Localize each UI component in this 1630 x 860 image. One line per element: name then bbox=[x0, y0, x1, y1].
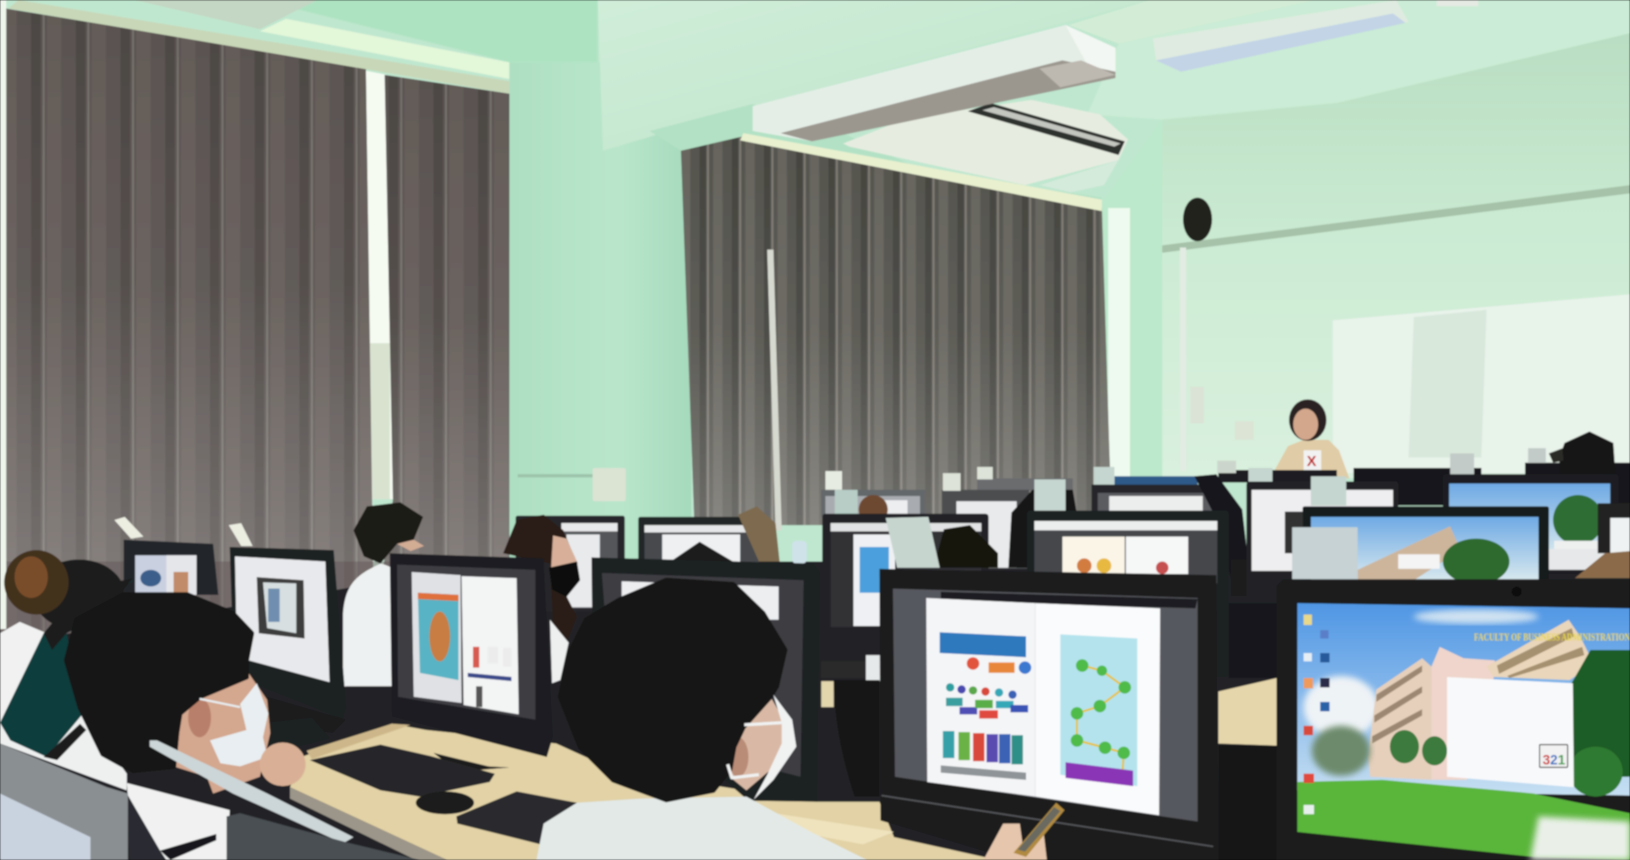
book toolbar bbox=[941, 592, 1198, 608]
right page infographic bbox=[1060, 634, 1137, 786]
paper tag bbox=[886, 517, 940, 568]
laptops front left bbox=[0, 744, 420, 860]
keyboards and mouse bbox=[310, 745, 577, 844]
wallpaper faded corner bbox=[1530, 816, 1630, 860]
ear bbox=[728, 737, 748, 777]
right page bbox=[1035, 603, 1160, 815]
monitor with digital book bbox=[879, 569, 1218, 860]
left curtains bbox=[0, 0, 509, 645]
media player icon: 321 bbox=[1543, 752, 1566, 767]
right edge monitor bbox=[1598, 503, 1630, 553]
teal hair bbox=[0, 580, 133, 757]
hand holding phone bbox=[983, 803, 1064, 860]
left page flow chart bbox=[946, 657, 1031, 719]
presenter: X bbox=[1307, 454, 1317, 470]
ceiling light fixtures bbox=[135, 0, 1478, 141]
person in dark cap back right bbox=[1549, 432, 1615, 474]
ear bbox=[188, 698, 211, 737]
dark haired student bbox=[1194, 474, 1251, 582]
mask flap bbox=[150, 740, 353, 843]
left page bottles bbox=[941, 731, 1026, 780]
monitor with campus desktop wallpaper bbox=[1277, 579, 1630, 860]
screen bbox=[893, 589, 1198, 822]
girl with black mask bbox=[503, 515, 580, 683]
student far left with bun bbox=[0, 550, 125, 728]
presenter bbox=[1272, 399, 1349, 478]
chair shadow bbox=[127, 793, 166, 860]
mask bbox=[728, 695, 796, 800]
desktop icons bbox=[1304, 615, 1330, 814]
monitor centre behind student bbox=[591, 557, 820, 802]
building bbox=[1368, 620, 1594, 780]
wall speaker bbox=[1183, 198, 1212, 241]
bag strap bbox=[44, 724, 86, 760]
face bbox=[174, 670, 270, 793]
desktop sky bbox=[1297, 603, 1630, 796]
installer dialog bbox=[1447, 677, 1574, 787]
student in white shirt middle row bbox=[343, 502, 424, 713]
monitor with wallpaper back right bbox=[1443, 474, 1619, 574]
desk surface bbox=[265, 718, 998, 860]
shirt bbox=[127, 783, 230, 860]
backpack strap bbox=[160, 834, 216, 860]
rear monitor cluster right bbox=[821, 474, 1630, 707]
monitor back left small bbox=[114, 517, 253, 595]
right desk and dark cabinet bbox=[1218, 678, 1277, 860]
left page banner bbox=[940, 632, 1026, 657]
left page bbox=[926, 598, 1035, 797]
dark room underlay below the monitors bbox=[0, 562, 1630, 860]
hair bbox=[560, 580, 785, 800]
hair bbox=[67, 595, 252, 771]
whiteboard and wall fittings bbox=[518, 247, 1630, 501]
trees bbox=[1312, 650, 1630, 797]
face bbox=[730, 697, 787, 790]
chin highlight bbox=[882, 796, 1213, 846]
webcam bbox=[1511, 587, 1522, 597]
dark hair top bbox=[44, 578, 133, 650]
center curtain bbox=[681, 133, 1110, 530]
front student left with teal hair behind bbox=[0, 578, 133, 790]
front student centre bbox=[536, 580, 867, 860]
white shirt behind bbox=[0, 713, 127, 790]
shirt bbox=[536, 797, 867, 860]
front student left bbox=[67, 595, 353, 860]
monitor with book spread bbox=[1027, 511, 1229, 677]
monitor left bbox=[230, 547, 346, 733]
media player icon bbox=[1540, 745, 1568, 767]
keyboard and desk bbox=[821, 661, 867, 678]
air conditioner bbox=[843, 100, 1128, 192]
black chair bbox=[834, 680, 879, 797]
monitor with wallpaper back centre bbox=[1303, 506, 1549, 581]
back row monitors and students center bbox=[516, 506, 807, 611]
paper tags on back monitors bbox=[825, 448, 1546, 512]
tag between monitors bbox=[1311, 476, 1346, 505]
student head behind monitor bbox=[934, 525, 998, 568]
mask ear strap bbox=[200, 699, 240, 707]
mask bbox=[210, 683, 268, 766]
lawn bbox=[1297, 780, 1630, 860]
monitor with book display centre left bbox=[390, 553, 553, 772]
clouds bbox=[1304, 676, 1378, 738]
hand bbox=[260, 742, 306, 786]
monitor with white window bbox=[1246, 481, 1398, 598]
far back row monitors bbox=[821, 463, 1630, 569]
